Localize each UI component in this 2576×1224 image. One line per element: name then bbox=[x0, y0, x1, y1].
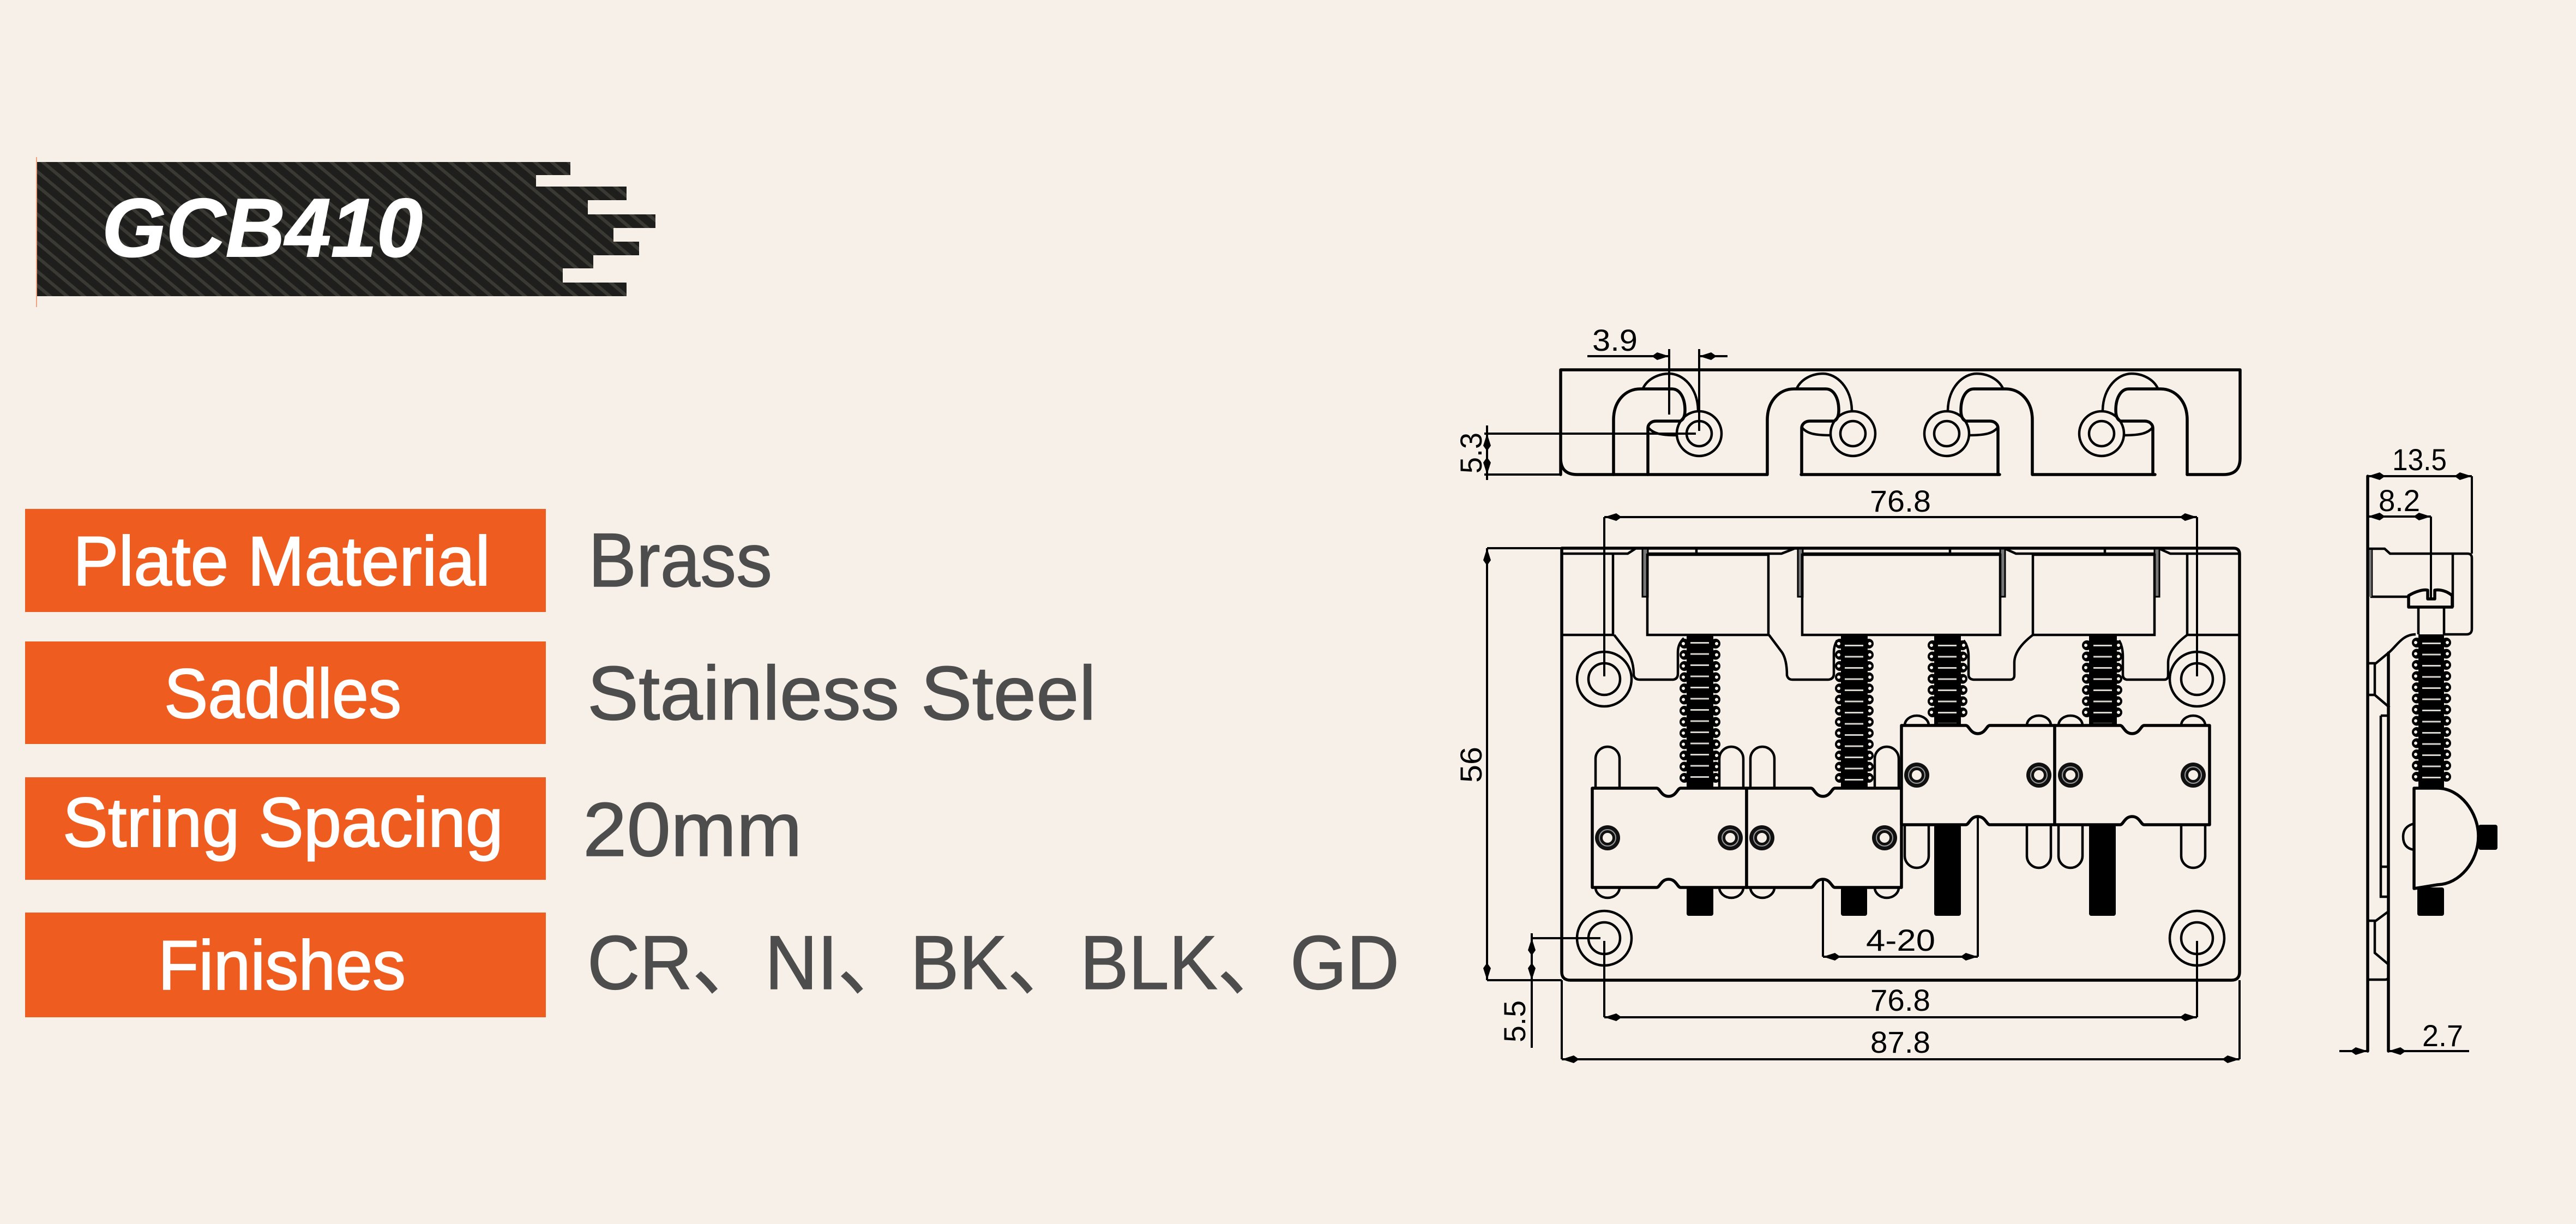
saddle 1 bbox=[1592, 788, 1747, 887]
spec row: saddles: Saddles bbox=[164, 655, 401, 733]
dimension: 4-20 bbox=[1823, 818, 1978, 957]
spec row: plate material: Brass bbox=[588, 517, 772, 603]
dimension: 76.8 upper bbox=[1604, 484, 2197, 676]
saddle bottom screw bbox=[2417, 887, 2444, 916]
saddle tabs bbox=[1596, 716, 2205, 898]
technical drawing: top view of base plate bbox=[1454, 323, 2240, 480]
round saddle profile bbox=[2414, 788, 2478, 889]
grey edge bar bbox=[2369, 550, 2372, 597]
dimension: 76.8 upper: 76.8 bbox=[1870, 484, 1931, 518]
dimension: 56 bbox=[1454, 548, 1562, 980]
saddle 2 bbox=[1747, 788, 1901, 887]
rear housing outline bbox=[2368, 549, 2472, 663]
dimension: 13.5: 13.5 bbox=[2392, 442, 2447, 477]
saddle height screws bbox=[1595, 763, 2206, 850]
spring 4 bbox=[2086, 635, 2118, 725]
spec row: string spacing: String Spacing bbox=[63, 784, 503, 862]
dimension: 87.8: 87.8 bbox=[1870, 1025, 1930, 1059]
saddle right screw bbox=[2478, 825, 2497, 850]
adjustment screw ends bbox=[1687, 825, 2116, 916]
dimension: 76.8 lower: 76.8 bbox=[1870, 983, 1930, 1017]
base plate outline bbox=[1562, 548, 2240, 980]
spec row: plate material: Plate Material bbox=[73, 523, 490, 601]
technical drawing: front view of bridge bbox=[1454, 484, 2240, 1059]
spec row: string spacing: 20mm bbox=[583, 787, 802, 872]
dimension: 3.9: 3.9 bbox=[1592, 323, 1638, 357]
saddle rail bars bbox=[1642, 549, 2159, 597]
dimension: 5.3: 5.3 bbox=[1454, 433, 1488, 473]
spring 1 bbox=[1683, 635, 1717, 788]
spring 2 bbox=[1839, 635, 1870, 788]
dimension: 87.8 bbox=[1562, 980, 2240, 1059]
spec row: finishes: CR、NI、BK、BLK、GD bbox=[587, 920, 1399, 1005]
spec row: finishes: Finishes bbox=[158, 927, 406, 1005]
spec row: plate material bbox=[25, 509, 772, 612]
spring 3 bbox=[1931, 635, 1964, 725]
saddle small bump bbox=[2403, 824, 2414, 850]
dimension: 3.9 bbox=[1587, 323, 1728, 431]
screw head bbox=[2409, 590, 2452, 607]
model banner: GCB410 bbox=[36, 157, 655, 307]
spec row: saddles bbox=[25, 641, 1096, 744]
dimension: 2.7: 2.7 bbox=[2422, 1018, 2463, 1053]
spec row: saddles: Stainless Steel bbox=[587, 650, 1096, 736]
saddle 3 bbox=[1901, 725, 2055, 825]
upper housing blocks bbox=[1647, 555, 2154, 635]
technical drawing: side view of bridge bbox=[2339, 442, 2497, 1053]
dimension: 4-20: 4-20 bbox=[1866, 923, 1935, 957]
dimension: 5.3 bbox=[1454, 425, 1696, 480]
spec row: string spacing bbox=[25, 777, 802, 880]
dimension: 56: 56 bbox=[1454, 747, 1488, 783]
housing curves bbox=[1614, 635, 2187, 680]
dimension: 5.5 bbox=[1497, 933, 1600, 1048]
upper lip details bbox=[1562, 548, 2240, 635]
plate details bbox=[2368, 663, 2390, 980]
side view spring bbox=[2416, 634, 2447, 788]
screw stem bbox=[2418, 607, 2444, 634]
saddle 4 bbox=[2055, 725, 2210, 825]
base plate profile bbox=[2368, 476, 2388, 1051]
dimension: 5.5: 5.5 bbox=[1497, 1000, 1532, 1042]
dimension: 76.8 lower bbox=[1604, 941, 2197, 1017]
spec row: finishes bbox=[25, 913, 1399, 1017]
model banner: GCB410: GCB410 bbox=[102, 182, 423, 274]
mounting holes bbox=[1577, 652, 2224, 965]
dimension: 8.2: 8.2 bbox=[2379, 483, 2420, 518]
